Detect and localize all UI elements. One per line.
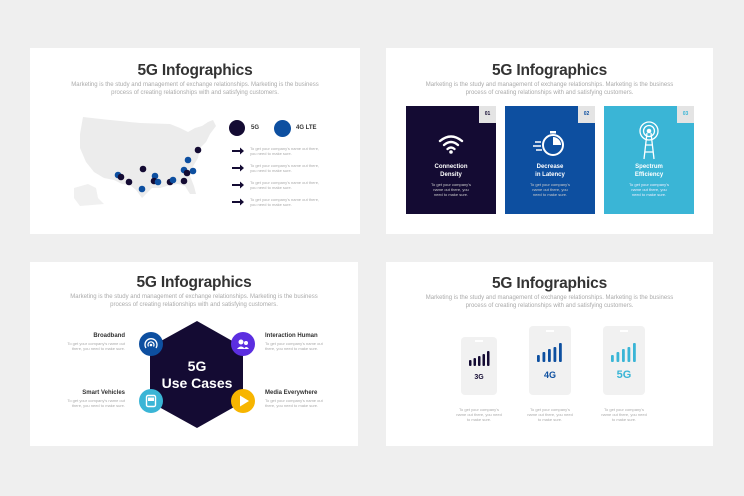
arrow list xyxy=(232,146,319,207)
arrow list: you need to make sure. xyxy=(250,151,292,156)
card 03: need to make sure. xyxy=(632,192,666,197)
panel: map slide xyxy=(30,48,360,234)
map of USA with dots xyxy=(74,117,216,206)
arrow list: To get your company's name out there, xyxy=(250,180,319,185)
legend xyxy=(229,120,317,137)
subtitle: Marketing is the study and management of exchange relationships. Marketing is the business xyxy=(70,294,318,300)
arrow list: To get your company's name out there, xyxy=(250,146,319,151)
card 02: name out there, you xyxy=(532,187,568,192)
captions: To get your company's xyxy=(459,407,499,412)
card 02: 02 xyxy=(584,111,589,117)
subtitle: Marketing is the study and management of exchange relationships. Marketing is the business xyxy=(426,82,673,88)
text: smart vehicles: there, you need to make sure. xyxy=(72,403,125,408)
card 02: To get your company's xyxy=(530,182,570,187)
text: smart vehicles: To get your company's name out xyxy=(67,398,125,403)
panel: phones slide: name out there, you need xyxy=(601,412,647,417)
arrow list: To get your company's name out there, xyxy=(250,163,319,168)
captions: to make sure. xyxy=(467,417,491,422)
text: smart vehicles: Smart Vehicles xyxy=(82,390,125,396)
subtitle xyxy=(426,294,673,308)
card 01: To get your company's xyxy=(431,182,471,187)
title: 5G Infographics xyxy=(138,62,252,79)
card 02: in Latency xyxy=(535,172,565,178)
subtitle xyxy=(426,82,673,96)
panel: phones slide xyxy=(386,262,713,446)
card 01: 01 xyxy=(485,111,490,117)
card 01: name out there, you xyxy=(433,187,469,192)
phone 3G: 3G xyxy=(474,374,484,381)
arrow list: you need to make sure. xyxy=(250,168,292,173)
arrow list: you need to make sure. xyxy=(250,202,292,207)
panel: phones slide: To get your company's xyxy=(604,407,644,412)
subtitle: Marketing is the study and management of exchange relationships. Marketing is the business xyxy=(71,82,319,88)
phone 4G: 4G xyxy=(544,370,556,380)
card 03: 03 xyxy=(683,111,688,117)
card 03: To get your company's xyxy=(629,182,669,187)
text: interaction human: Interaction Human xyxy=(265,333,318,339)
icon: interaction xyxy=(231,332,255,356)
card 03: name out there, you xyxy=(631,187,667,192)
hexagon label: Use Cases xyxy=(162,375,232,391)
subtitle: process of creating relationships with and satisfying customers. xyxy=(466,90,633,96)
subtitle: process of creating relationships with and satisfying customers. xyxy=(466,302,633,308)
title: 5G Infographics xyxy=(492,275,607,292)
text: media everywhere: To get your company's name out xyxy=(265,398,323,403)
title: 5G Infographics xyxy=(492,62,607,79)
card 02: need to make sure. xyxy=(533,192,567,197)
text: interaction human: there, you need to make sure. xyxy=(265,346,318,351)
legend: 4G LTE xyxy=(296,125,317,131)
subtitle: process of creating relationships with and satisfying customers. xyxy=(110,302,278,308)
phone 5G xyxy=(603,326,645,395)
hexagon xyxy=(150,321,243,428)
panel: phones slide: To get your company's xyxy=(530,407,570,412)
text: media everywhere: Media Everywhere xyxy=(265,390,317,396)
text: media everywhere: there, you need to make sure. xyxy=(265,403,318,408)
text: interaction human xyxy=(265,332,323,351)
hexagon label: 5G xyxy=(188,358,206,374)
subtitle: process of creating relationships with and satisfying customers. xyxy=(111,90,279,96)
hexagon label xyxy=(162,358,232,391)
text: interaction human: To get your company's name out xyxy=(265,341,323,346)
phone 4G xyxy=(529,326,571,395)
text: media everywhere xyxy=(265,390,323,408)
card 01: Connection xyxy=(434,164,468,170)
panel: cards slide xyxy=(386,48,713,234)
panel: phones slide: name out there, you need xyxy=(527,412,573,417)
card 02 xyxy=(505,106,595,214)
captions: name out there, you need xyxy=(456,412,502,417)
subtitle: Marketing is the study and management of exchange relationships. Marketing is the business xyxy=(426,295,673,301)
card 03 xyxy=(604,106,694,214)
icon: vehicle xyxy=(139,389,163,413)
panel: use cases slide xyxy=(30,262,358,446)
title: 5G Infographics xyxy=(136,274,252,291)
subtitle xyxy=(71,82,319,96)
card 01: Density xyxy=(440,172,462,178)
legend: 5G xyxy=(251,125,259,131)
panel: phones slide: to make sure. xyxy=(538,417,562,422)
text: broadband: To get your company's name out xyxy=(67,341,125,346)
arrow list: To get your company's name out there, xyxy=(250,197,319,202)
subtitle xyxy=(70,294,318,308)
phone 3G xyxy=(461,337,497,395)
card 02: Decrease xyxy=(537,164,563,170)
card 01: need to make sure. xyxy=(434,192,468,197)
text: smart vehicles xyxy=(67,390,125,408)
phone 5G: 5G xyxy=(617,369,631,381)
icon: media xyxy=(231,389,255,413)
captions xyxy=(456,407,502,422)
card 03: Efficiency xyxy=(635,172,663,178)
card 03: Spectrum xyxy=(635,164,663,170)
arrow list: you need to make sure. xyxy=(250,185,292,190)
card 01 xyxy=(406,106,496,214)
text: broadband xyxy=(67,332,125,351)
icon: broadband xyxy=(139,332,163,356)
text: broadband: Broadband xyxy=(93,333,125,339)
panel: phones slide: to make sure. xyxy=(612,417,636,422)
text: broadband: there, you need to make sure. xyxy=(72,346,125,351)
